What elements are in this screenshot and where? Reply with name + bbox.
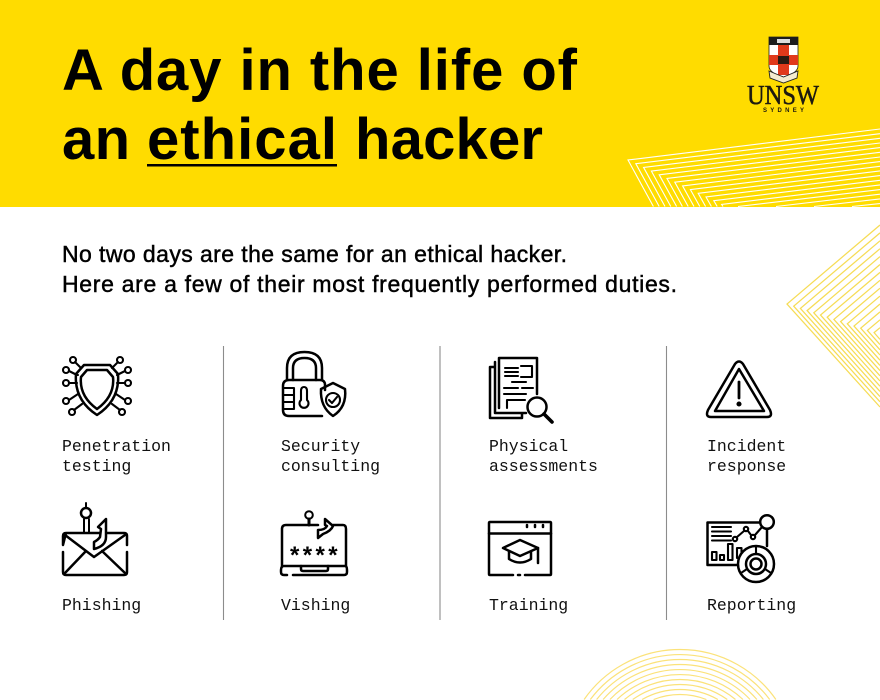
item: training [489,522,568,615]
column dividers [224,346,666,620]
label: Security [281,437,360,456]
icon: browser graduation cap [489,522,551,575]
item: incident response [707,362,786,476]
bottom arc pattern [584,650,776,700]
label: testing [62,457,131,476]
UNSW logo [747,37,819,114]
label [62,437,171,476]
title: ethical [147,107,337,172]
label: Reporting [707,596,796,615]
label: response [707,457,786,476]
item: physical assessments [489,358,598,476]
item: security consulting [281,352,380,476]
label: Vishing [281,596,350,615]
icon: warning triangle [707,362,771,417]
icon: hooked envelope [63,503,127,575]
item: vishing [281,511,350,615]
title: hacker [355,107,543,172]
icon: padlock and shield [283,352,345,416]
label: Physical [489,437,568,456]
label: Incident [707,437,786,456]
right chevron pattern [787,225,880,407]
header band [0,0,880,207]
label: Penetration [62,437,171,456]
intro text [62,241,677,297]
icon: laptop password [281,511,347,575]
icon: dashboard with target [708,515,774,582]
label [707,437,786,476]
UNSW logo: UNSW [747,80,819,110]
item: penetration testing [62,357,171,476]
title: A day in the life of [62,38,578,103]
label: Phishing [62,596,141,615]
asterisks: **** [290,542,341,569]
label: consulting [281,457,380,476]
label: assessments [489,457,598,476]
crest [769,37,798,83]
intro text: Here are a few of their most frequently performed duties. [62,271,677,297]
icon: documents and magnifier [490,358,552,422]
item: phishing [62,503,141,615]
label [489,437,598,476]
intro text: No two days are the same for an ethical hacker. [62,241,567,267]
item: reporting [707,515,796,615]
icon: shield circuit [63,357,131,415]
title: an [62,107,130,172]
label [281,437,380,476]
header chevron pattern [628,129,880,206]
UNSW logo: SYDNEY [763,108,804,114]
label: Training [489,596,568,615]
title [62,38,578,172]
